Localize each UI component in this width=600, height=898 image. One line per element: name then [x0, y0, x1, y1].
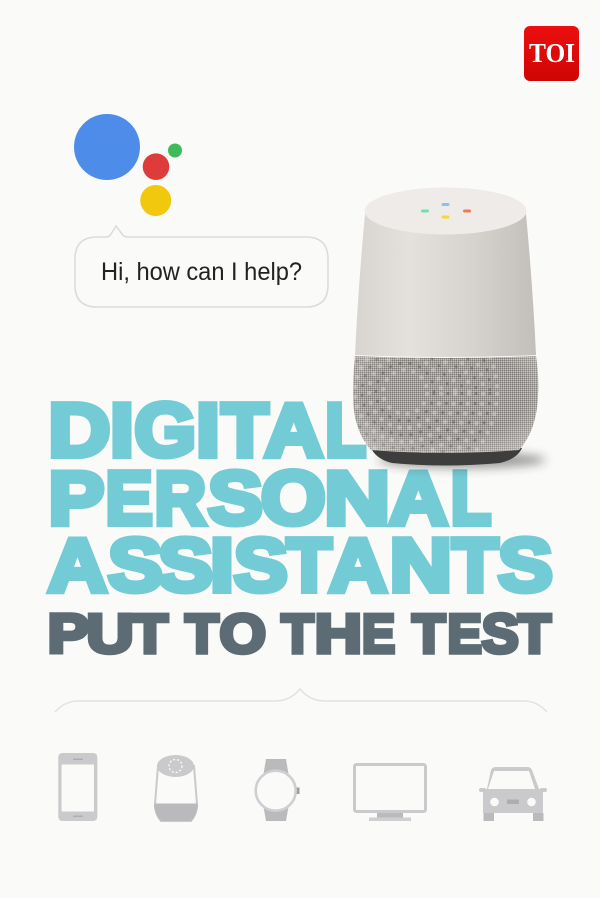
brace	[55, 689, 547, 712]
title: Digital Personal Assistants: N	[324, 457, 390, 541]
subtitle: Put to the test: H	[315, 603, 362, 665]
subtitle: Put to the test: T	[518, 603, 551, 665]
subtitle: Put to the test: T	[185, 603, 219, 665]
subtitle: Put to the test: T	[281, 603, 314, 665]
title: Digital Personal Assistants: T	[222, 389, 268, 473]
title: Digital Personal Assistants: I	[196, 389, 220, 473]
title: Digital Personal Assistants: P	[49, 457, 104, 541]
speaker top	[364, 188, 526, 234]
title: Digital Personal Assistants: A	[48, 524, 107, 608]
subtitle: Put to the test: E	[448, 603, 482, 665]
subtitle: Put to the test: U	[87, 603, 134, 665]
title: Digital Personal Assistants: L	[451, 457, 491, 541]
title: Digital Personal Assistants: A	[329, 524, 387, 608]
title: Digital Personal Assistants: A	[389, 457, 448, 541]
title: Digital Personal Assistants	[48, 389, 553, 608]
speaker fabric	[353, 356, 538, 453]
title: Digital Personal Assistants: S	[498, 524, 553, 608]
title: Digital Personal Assistants: I	[110, 389, 134, 473]
title: Digital Personal Assistants: T	[452, 524, 498, 608]
title: Digital Personal Assistants: T	[287, 524, 332, 608]
title: Digital Personal Assistants: I	[210, 524, 234, 608]
title: Digital Personal Assistants: A	[265, 389, 323, 473]
title: Digital Personal Assistants: D	[48, 389, 110, 473]
subtitle: Put to the test: O	[220, 603, 266, 665]
icon: smartwatch	[256, 759, 300, 821]
title: Digital Personal Assistants: S	[108, 524, 163, 608]
title: Digital Personal Assistants: S	[208, 457, 262, 541]
speaker body	[355, 214, 536, 357]
illustration: smart speaker	[353, 188, 549, 475]
icon: smart speaker	[154, 755, 198, 821]
icon: phone	[58, 753, 97, 821]
title: Digital Personal Assistants: R	[154, 457, 206, 541]
title: Digital Personal Assistants: E	[106, 457, 153, 541]
speech bubble: Hi, how can I help?	[101, 258, 302, 286]
icon: TOI logo: TOI	[529, 38, 575, 68]
subtitle: Put to the test: P	[48, 603, 89, 665]
title: Digital Personal Assistants: N	[390, 524, 452, 608]
title: Digital Personal Assistants: G	[134, 389, 196, 473]
subtitle: Put to the test: T	[412, 603, 445, 665]
icon: car	[479, 767, 547, 821]
speaker shadow	[378, 452, 546, 468]
title: Digital Personal Assistants: O	[261, 457, 326, 541]
subtitle: Put to the test: T	[132, 603, 168, 665]
title: Digital Personal Assistants: S	[234, 524, 288, 608]
speaker base	[371, 448, 522, 466]
title: Digital Personal Assistants: S	[158, 524, 213, 608]
speaker lights	[421, 203, 471, 218]
title: Digital Personal Assistants: L	[325, 389, 366, 473]
subtitle: Put to the test: S	[482, 603, 519, 665]
infographic canvas	[45, 26, 579, 822]
subtitle: Put to the test: E	[362, 603, 395, 665]
icon: assistant coloured dots	[74, 114, 182, 216]
icon: monitor	[354, 764, 426, 821]
speech bubble	[75, 226, 328, 307]
icon: TOI logo	[524, 26, 579, 81]
